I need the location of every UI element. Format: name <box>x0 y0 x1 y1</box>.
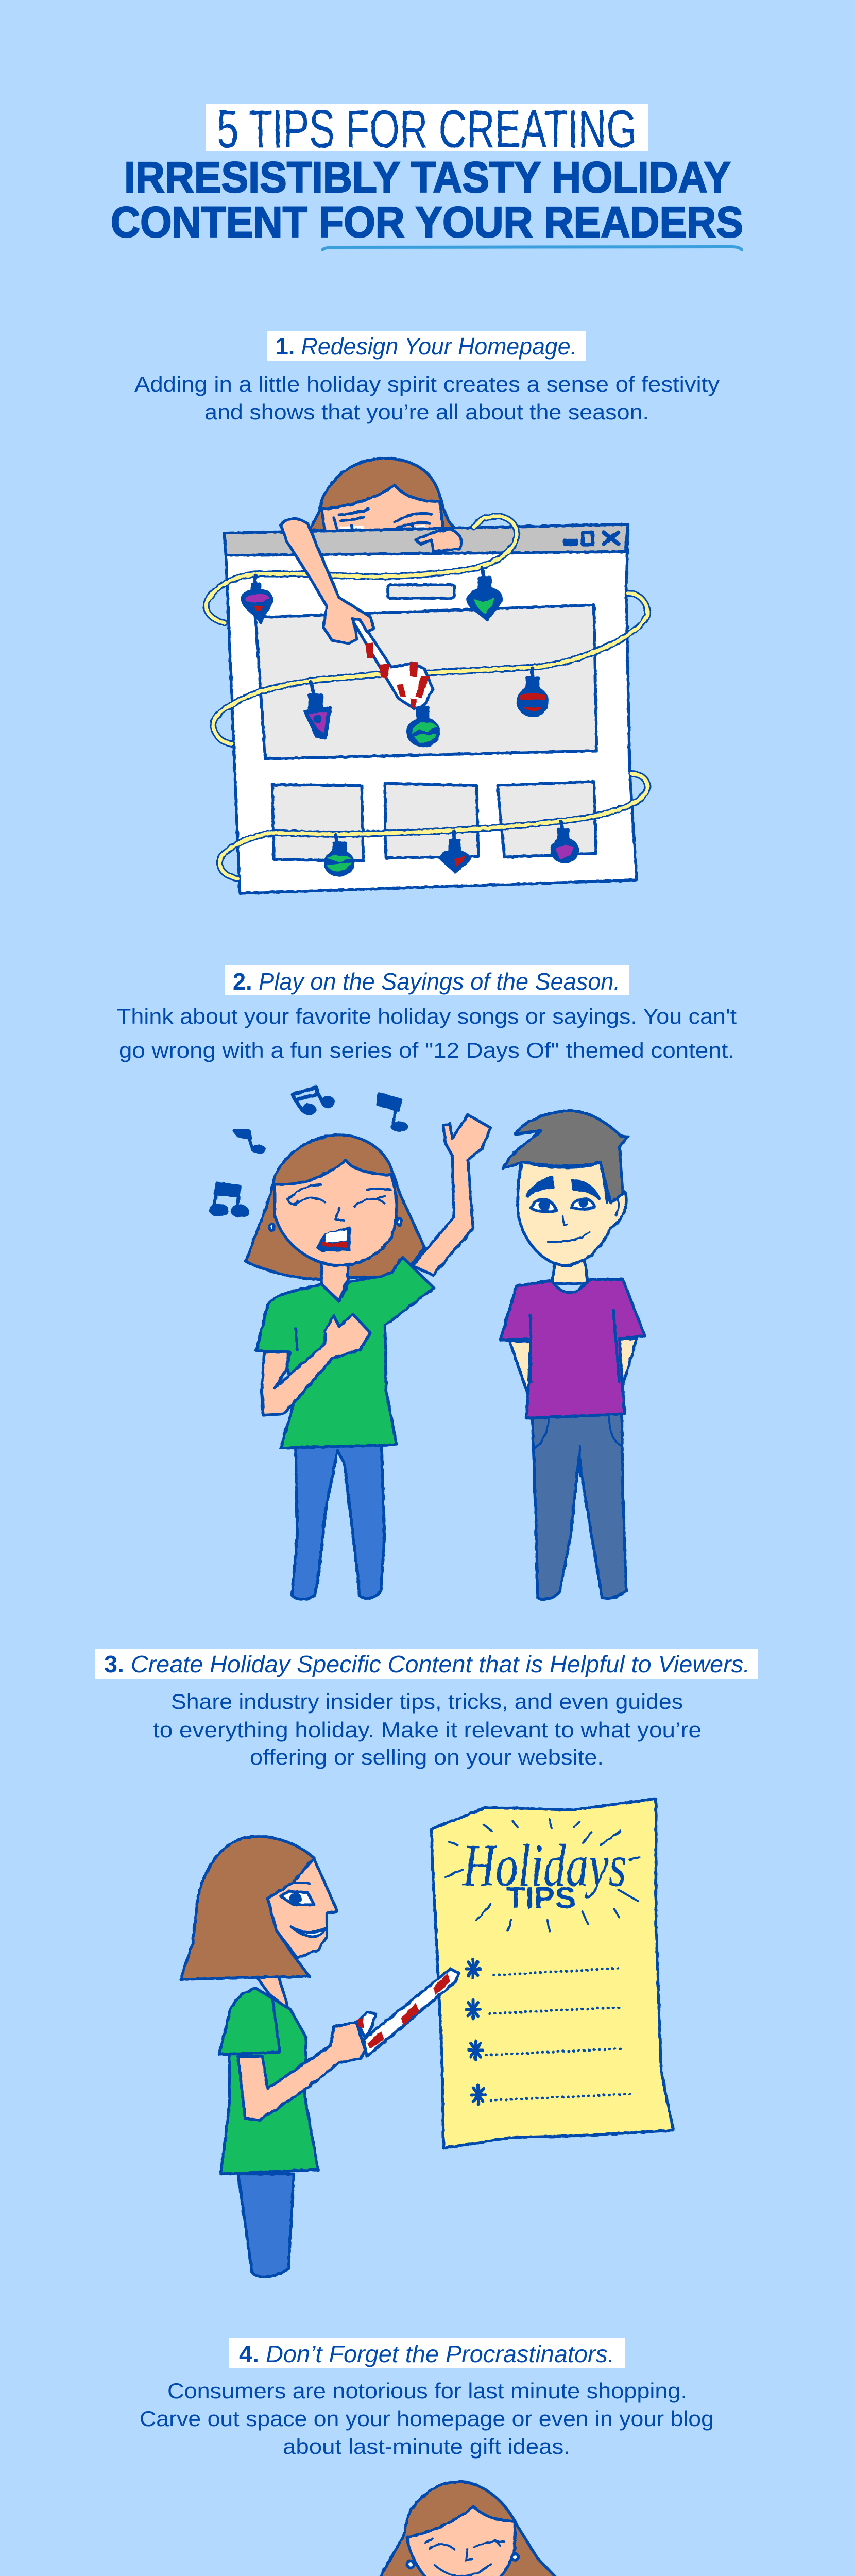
title line 1: 5 TIPS FOR CREATING <box>217 99 637 159</box>
music notes <box>209 1087 408 1217</box>
title line 2: IRRESISTIBLY TASTY HOLIDAY <box>124 153 731 201</box>
illustration: woman peeking over festive browser window <box>206 459 647 893</box>
tip 3 body line 3: offering or selling on your website. <box>250 1745 604 1769</box>
illustration: woman pointing at holiday tips poster <box>181 1799 673 2277</box>
tip 1 heading: 1. Redesign Your Homepage. <box>276 333 577 360</box>
title line 3: CONTENT FOR YOUR READERS <box>111 198 743 246</box>
panel: tip 1 text <box>134 331 720 424</box>
holiday tips poster <box>431 1799 673 2148</box>
tip 2 body line 1: Think about your favorite holiday songs or sayings. You can't <box>117 1004 737 1028</box>
woman head behind window <box>310 459 458 533</box>
title underline <box>322 247 742 250</box>
tip 1 body line 2: and shows that you’re all about the season. <box>204 400 649 424</box>
tip 3 body line 2: to everything holiday. Make it relevant to what you’re <box>153 1718 702 1742</box>
illustration: woman singing beside man <box>209 1087 645 1599</box>
holiday tips poster: TIPS <box>506 1880 576 1915</box>
woman holding stacked gifts <box>371 2482 558 2576</box>
tip 2 body line 2: go wrong with a fun series of "12 Days Of" themed content. <box>119 1038 734 1062</box>
tip 2 heading: 2. Play on the Sayings of the Season. <box>233 968 620 995</box>
tip 4 heading: 4. Don’t Forget the Procrastinators. <box>239 2341 614 2367</box>
tip 4 body line 3: about last-minute gift ideas. <box>283 2434 570 2459</box>
panel: tip 3 text <box>95 1649 758 1769</box>
arm and candy cane <box>281 519 461 708</box>
woman in profile <box>181 1837 365 2277</box>
tip 4 body line 1: Consumers are notorious for last minute shopping. <box>167 2379 687 2403</box>
tip 1 heading box <box>267 331 586 361</box>
illustration: woman carrying gifts with shopping bag <box>296 2482 558 2576</box>
browser window <box>224 524 637 893</box>
tip 1 body line 1: Adding in a little holiday spirit creates a sense of festivity <box>134 372 720 396</box>
candy cane pointer <box>357 1969 459 2056</box>
tip 3 heading: 3. Create Holiday Specific Content that is Helpful to Viewers. <box>104 1651 750 1677</box>
holiday tips poster: Holidays <box>462 1833 626 1899</box>
ornaments <box>242 568 577 875</box>
tip 4 heading box <box>229 2338 625 2368</box>
tip 4 body line 2: Carve out space on your homepage or even in your blog <box>140 2406 714 2431</box>
tip 3 heading box <box>95 1649 758 1679</box>
title <box>111 99 743 250</box>
tip 2 heading box <box>225 965 629 995</box>
panel: tip 2 text <box>117 965 737 1062</box>
smiling man <box>500 1111 645 1599</box>
singing woman <box>246 1115 490 1599</box>
tip 3 body line 1: Share industry insider tips, tricks, and even guides <box>171 1689 683 1714</box>
light strings <box>206 516 647 878</box>
panel: tip 4 text <box>140 2338 714 2459</box>
title highlight box <box>206 104 648 151</box>
